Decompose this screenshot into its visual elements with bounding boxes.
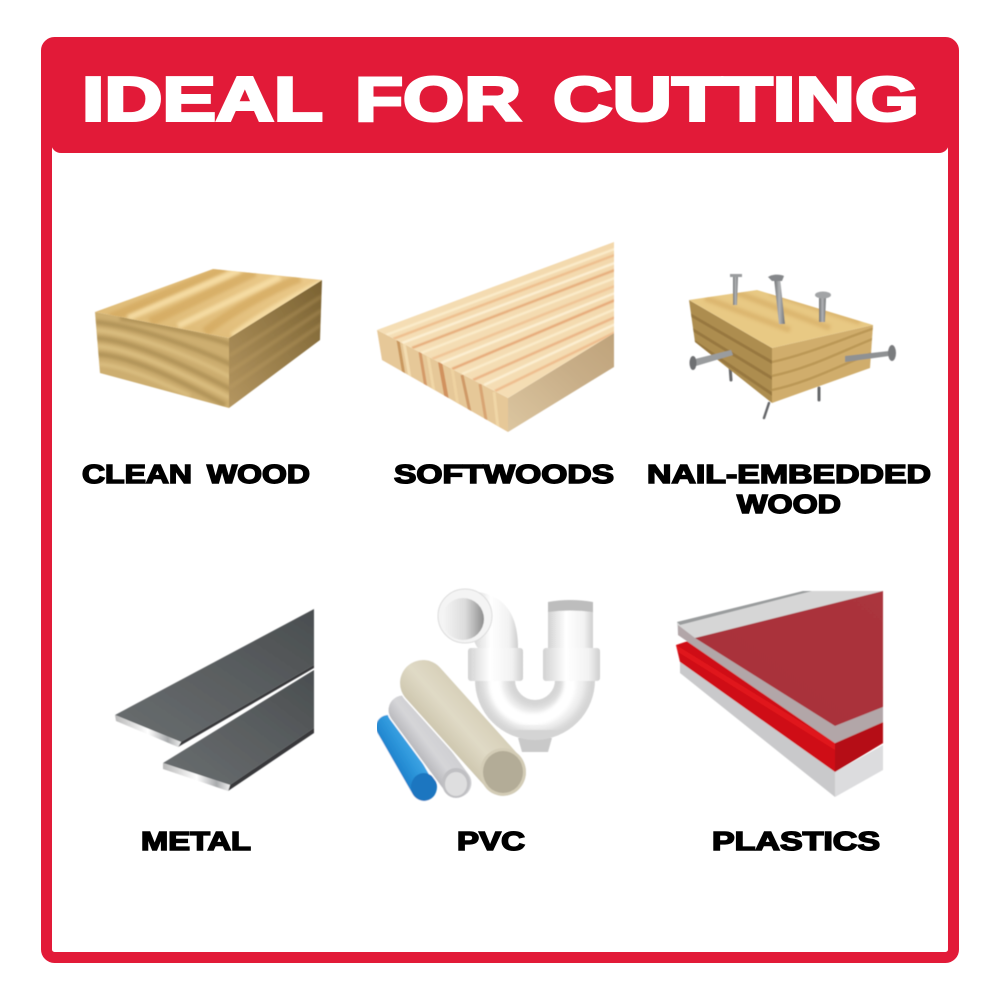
red sheet <box>676 637 883 772</box>
trap bend <box>495 670 575 720</box>
label: metal: METAL <box>141 826 251 856</box>
header band <box>51 42 949 153</box>
red top face <box>695 591 883 726</box>
blue pipe <box>388 727 423 788</box>
icon: metal bars <box>115 609 314 791</box>
title: FOR <box>355 66 521 134</box>
panel: metal <box>115 609 314 856</box>
panel: softwoods <box>377 242 620 489</box>
nails <box>690 274 896 370</box>
collars <box>468 648 523 681</box>
label: clean wood: CLEAN <box>82 459 192 489</box>
label: plastics: PLASTICS <box>712 826 880 856</box>
icon: clean wood block <box>95 268 322 408</box>
panel: nail-embedded wood <box>647 274 931 519</box>
elbow body <box>472 592 518 648</box>
gray pipe <box>403 710 457 783</box>
panel: clean wood <box>82 268 322 489</box>
label: nail-embedded wood <box>647 459 931 519</box>
title: IDEAL <box>82 66 323 134</box>
beige pipe <box>423 683 503 772</box>
title: CUTTING <box>553 66 919 134</box>
clear sheet <box>677 591 883 743</box>
gray sheet <box>680 662 835 797</box>
label: pvc: PVC <box>457 826 525 856</box>
trap nub <box>518 738 552 752</box>
upright <box>548 602 593 648</box>
icon: wood block with nails <box>689 274 896 418</box>
panel: pvc <box>388 589 600 856</box>
icon: pvc pipes <box>388 589 600 801</box>
label: clean wood <box>82 459 310 489</box>
title <box>82 66 919 134</box>
icon: softwood plank <box>377 242 620 432</box>
lower nail tips <box>730 366 819 418</box>
icon: plastic sheets <box>676 591 883 797</box>
elbow ring <box>438 589 492 643</box>
panel: plastics <box>676 591 883 856</box>
label: nail-embedded wood: WOOD <box>737 489 841 519</box>
label: softwoods: SOFTWOODS <box>394 459 614 489</box>
label: clean wood: WOOD <box>207 459 310 489</box>
label: nail-embedded wood: NAIL-EMBEDDED <box>647 459 931 489</box>
